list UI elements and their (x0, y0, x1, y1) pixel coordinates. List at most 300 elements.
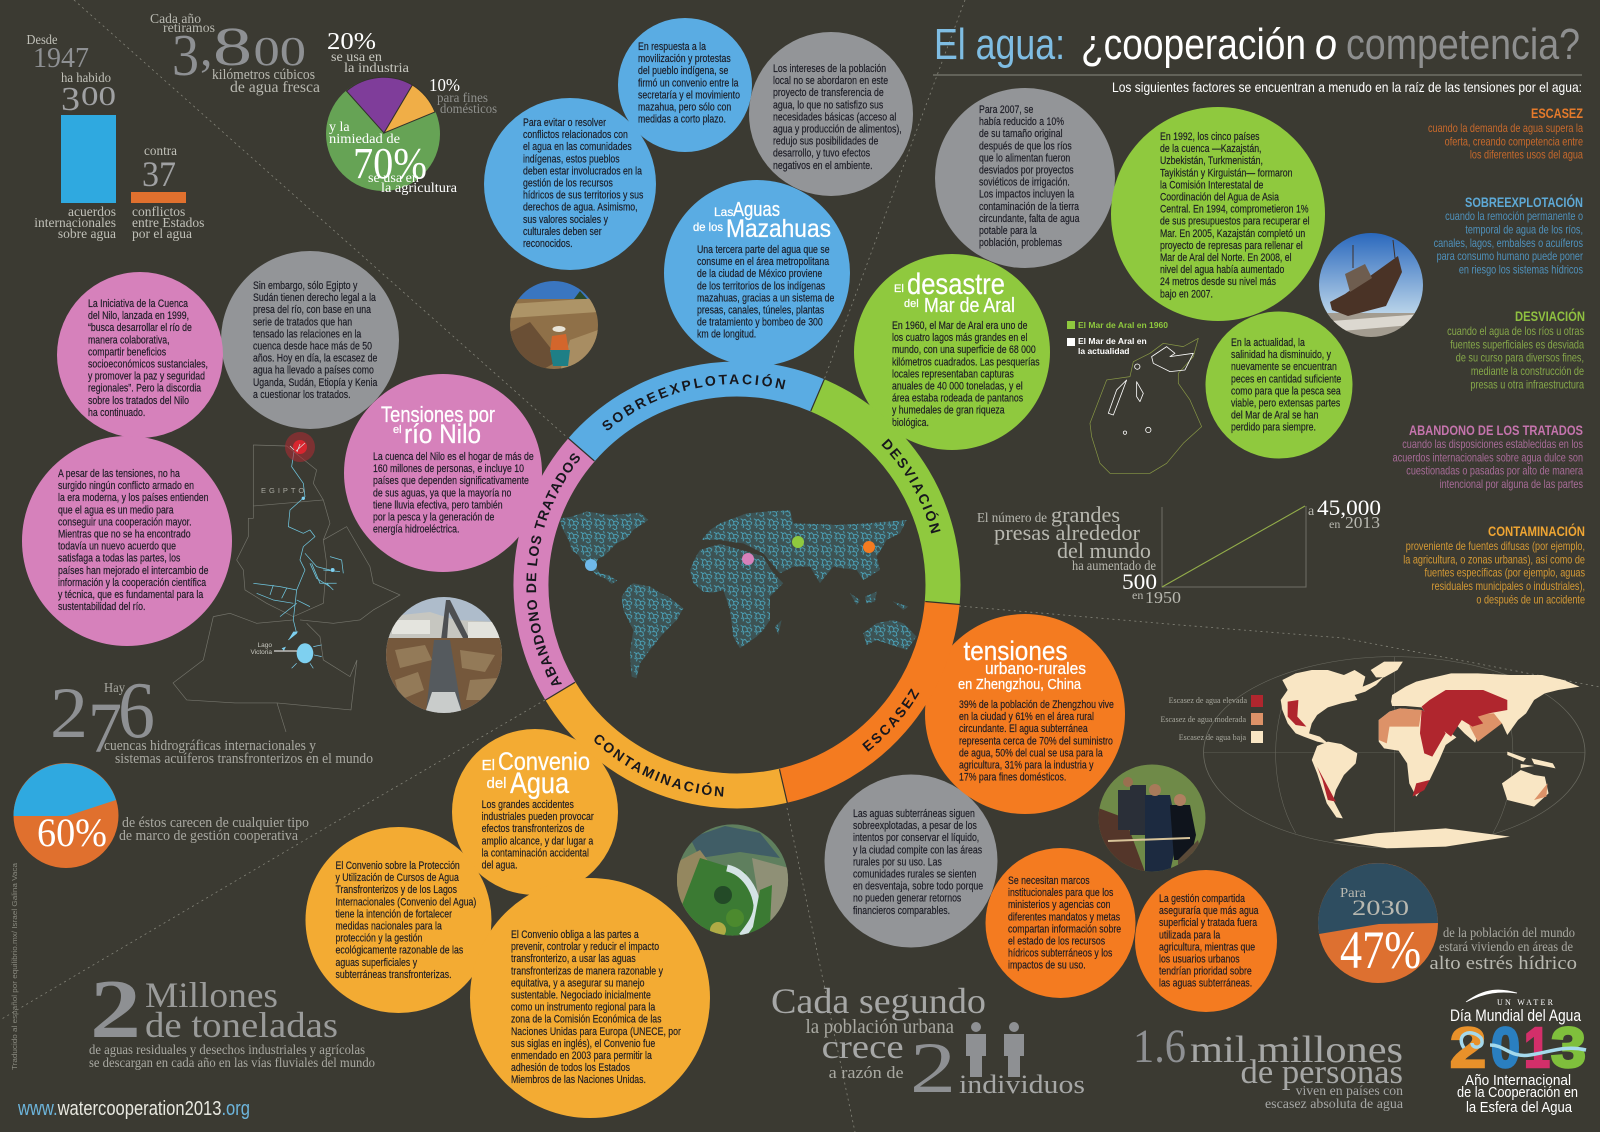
pie chart: 47% by 2030: alto estrés hídrico (1430, 953, 1577, 974)
circle: El Convenio obliga: prevenir, controlar y reducir el impacto (511, 941, 660, 953)
definition: Desviación: de su curso para diversos fines, (1456, 353, 1584, 365)
stat: 2 million tonnes: Millones (145, 975, 278, 1015)
circle: El Convenio sobre la Protección: tiene la intención de fortalecer (336, 909, 453, 921)
circle: En respuesta: medidas a corto plazo. (638, 114, 726, 126)
circle: Para evitar o resolver: indígenas, estos pueblos (523, 154, 620, 166)
circle: En 1992 (1111, 107, 1325, 321)
map: Aral Sea outline (1090, 338, 1202, 473)
circle: Para 2007: población, problemas (979, 237, 1062, 249)
stat: 300 agreements vs 37 conflicts: por el agua (132, 226, 192, 241)
circle: Tensiones por el río Nilo (344, 374, 542, 572)
circle: La gestión compartida: agricultura, mientras que (1159, 942, 1256, 954)
circle: El Convenio sobre la Protección: medidas nacionales para la (336, 921, 442, 933)
circle: Para 2007: contaminación de la tierra (979, 201, 1079, 213)
pie chart: 60%: 60% (37, 810, 107, 855)
stat: 300 agreements vs 37 conflicts: internacionales (34, 215, 116, 230)
circle: Sin embargo: Uganda, Sudán, Etiopía y Kenia (253, 377, 378, 389)
stat: 300 agreements vs 37 conflicts: entre Estados (132, 215, 204, 230)
circle: Las Aguas de los Mazahuas (664, 180, 850, 366)
circle: Para evitar o resolver: conflictos relacionados con (523, 129, 628, 141)
circle: En respuesta: mazahua, pero sólo con (638, 102, 731, 114)
circle: tensiones urbano-rurales: 39% de la población de Zhengzhou vive (959, 699, 1114, 711)
circle: Sin embargo: agua ha llevado a países como (253, 365, 374, 377)
circle: Para evitar o resolver: Para evitar o resolver (523, 117, 607, 129)
legend: water stress (1160, 695, 1263, 743)
circle: tensiones urbano-rurales: urbano-rurales (985, 659, 1086, 678)
circle: Sin embargo (221, 251, 399, 429)
circle: En la actualidad: salinidad ha disminuido, y (1231, 349, 1331, 361)
circle: Tensiones por el río Nilo: países que dependen significativamente (373, 475, 529, 487)
circle: En respuesta: En respuesta a la (638, 41, 706, 53)
definition: Contaminación: la agricultura, o zonas urbanas), así como de (1403, 554, 1585, 567)
title: o (1315, 20, 1337, 69)
legend: Aral Sea: El Mar de Aral en 1960 (1078, 320, 1168, 330)
definition: Escasez: ESCASEZ (1531, 105, 1583, 121)
circle: Iniciativa de la Cuenca del Nilo: “busca desarrollar el río de (88, 322, 192, 334)
circle: El Convenio obliga: zona de la Comisión Económica de las (511, 1014, 662, 1026)
pie chart: 60% (14, 763, 309, 868)
definition: Sobreexplotación: temporal de agua de los ríos, (1465, 225, 1583, 237)
circle: En 1992: Central. En 1994, comprometieron 1% (1160, 204, 1309, 216)
circle: Los intereses de la población: Los intereses de la población (773, 63, 886, 75)
stat: 300 agreements vs 37 conflicts: conflictos (132, 204, 185, 219)
logo: World Water Day 2013: 2 (1450, 1016, 1486, 1080)
pie chart: water use: 20% (327, 29, 376, 55)
circle: Las aguas subterráneas: y la ciudad compite con las áreas (853, 845, 982, 857)
circle: El desastre del Mar de Aral: locales representaban capturas (892, 369, 1014, 381)
circle: En 1992: Mar. En 2005, Kazajstán completó un (1160, 228, 1305, 240)
circle: El Convenio obliga: transfronterizas de manera razonable y (511, 966, 663, 978)
circle: Sin embargo: Sudán tienen derecho legal a la (253, 292, 376, 304)
pie chart: 60%: de éstos carecen de cualquier tipo (122, 815, 309, 831)
circle: Para evitar o resolver (484, 98, 656, 270)
circle: Se necesitan (986, 848, 1136, 998)
stat: 276 basins: Hay (104, 681, 125, 696)
stat: urban growth: la población urbana (806, 1016, 954, 1038)
logo: World Water Day 2013: la Esfera del Agua (1466, 1099, 1573, 1116)
circle: A pesar de las tensiones (22, 436, 232, 646)
definition: Desviación: fuentes superficiales es desviada (1450, 339, 1584, 352)
pie chart: water use: para fines (437, 90, 488, 105)
circle: El Convenio obliga: transfronterizo, a usar las aguas (511, 953, 636, 965)
definition: Desviación: presas u otra infraestructura (1470, 379, 1584, 392)
circle: La gestión compartida: los usuarios urbanos (1159, 954, 1240, 966)
circle: Iniciativa de la Cuenca del Nilo (57, 272, 223, 438)
circle: Para 2007: Para 2007, se (979, 104, 1034, 116)
bar: agreements (61, 115, 116, 203)
circle: Para evitar o resolver: gestión de los recursos (523, 178, 613, 190)
circle: En respuesta: firmó un convenio entre la (638, 78, 739, 90)
circle: En 1992: la Comisión Interestatal de (1160, 180, 1264, 192)
circle: La gestión compartida: las aguas subterráneas. (1159, 978, 1252, 990)
circle: Iniciativa de la Cuenca del Nilo: socioeconómicos sustanciales, (88, 359, 208, 371)
legend: water stress: Escasez de agua baja (1179, 733, 1246, 742)
circle: Los intereses de la población: agua, lo que no satisfizo sus (773, 100, 883, 112)
circle: En 1992: Uzbekistán, Turkmenistán, (1160, 155, 1263, 167)
circle: Sin embargo: tensado las relaciones en la (253, 329, 362, 341)
circle: tensiones urbano-rurales: agricultura, 31% para la industria y (959, 760, 1094, 772)
definition: Sobreexplotación: en riesgo los sistemas hídricos (1459, 265, 1583, 277)
stat: dams chart: 1950 (1145, 588, 1181, 607)
circle: tensiones urbano-rurales: tensiones (964, 636, 1068, 666)
stat: 2 million tonnes: de toneladas (145, 1005, 338, 1045)
icon: red glow on Nile delta (285, 432, 315, 462)
circle: El Convenio sobre la Protección: El Convenio sobre la Protección (336, 860, 460, 872)
circle: tensiones urbano-rurales: en la ciudad y 61% en el área rural (959, 711, 1094, 723)
stat: 300 agreements vs 37 conflicts: ha habido (61, 71, 111, 86)
circle: A pesar de las tensiones: A pesar de las tensiones, no ha (58, 468, 180, 480)
stat: dams chart: 2013 (1345, 513, 1380, 532)
stat: 276 basins (50, 667, 373, 768)
stat: 3,800 km3: retiramos (163, 21, 215, 36)
stat: urban growth (771, 981, 1085, 1108)
stat: dams chart: 500 (1122, 569, 1157, 594)
circle: El Convenio sobre la Protección (306, 827, 492, 1013)
circle: El desastre del Mar de Aral: y humedales de gran riqueza (892, 405, 1005, 417)
logo: World Water Day 2013: 3 (1551, 1016, 1586, 1080)
circle: El Convenio obliga: Miembros de las Naciones Unidas. (511, 1074, 646, 1086)
circle: El desastre del Mar de Aral: biológica. (892, 417, 929, 429)
stat: urban growth: 2 (910, 1028, 956, 1108)
icon: two people (966, 1022, 1024, 1077)
pie chart: 47% by 2030: de la población del mundo (1443, 925, 1575, 940)
circle: El Convenio sobre la Protección: protección y la gestión (336, 933, 422, 945)
photo: river valley (677, 824, 789, 938)
pie chart: water use (326, 29, 497, 196)
circle: Las Aguas de los Mazahuas: de los (693, 220, 723, 234)
stat: 3,800 km3: , (200, 20, 212, 76)
stat: 300 agreements vs 37 conflicts: 37 (142, 154, 176, 194)
stat: 276 basins: sistemas acuíferos transfronterizos en el mundo (115, 751, 373, 767)
circle: Para 2007: que lo alimentan fueron (979, 153, 1070, 165)
legend: Aral Sea: El Mar de Aral en (1078, 336, 1147, 346)
label: Lago Victoria: Victoria (250, 649, 272, 656)
circle: En la actualidad: como para que la pesca sea (1231, 386, 1341, 398)
stat: 300 agreements vs 37 conflicts: Desde (26, 33, 58, 48)
circle: Tensiones por el río Nilo: tiene lluvia efectiva, pero también (373, 500, 503, 512)
circle: Se necesitan: compartan información sobre (1008, 924, 1122, 936)
circle: Los intereses de la población (749, 32, 913, 196)
circle: Las aguas subterráneas: intentos por conservar el líquido, (853, 832, 979, 844)
circle: Iniciativa de la Cuenca del Nilo: y promover la paz y seguridad (88, 371, 205, 383)
ring segment: Contaminación (546, 682, 787, 808)
ring segment: Abandono de los tratados (513, 438, 595, 700)
circle: En la actualidad: peces en cantidad suficiente (1231, 374, 1342, 386)
circle: Para evitar o resolver: hídricos de sus territorios y sus (523, 190, 643, 202)
circle: En respuesta: movilización y protestas (638, 53, 731, 65)
circle: Sin embargo: serie de tratados que han (253, 317, 352, 329)
circle: Tensiones por el río Nilo: de sus aguas, ya que la mayoría no (373, 488, 512, 500)
circle: Iniciativa de la Cuenca del Nilo: compartir beneficios (88, 347, 166, 359)
title: ¿cooperación (1081, 20, 1306, 69)
stat: 1.6 billion: 1.6 (1133, 1020, 1186, 1073)
circle: Las aguas subterráneas: en desventaja, sobre todo porque (853, 881, 984, 893)
stat: 276 basins: 2 (50, 673, 88, 753)
circle: El Convenio obliga: como un instrumento regional para la (511, 1002, 656, 1014)
logo: World Water Day 2013: 0 (1491, 1016, 1520, 1080)
logo: World Water Day 2013: UN WATER (1497, 998, 1554, 1007)
circle: Las Aguas de los Mazahuas: Las (714, 205, 733, 219)
circle: A pesar de las tensiones: todavía un nuevo acuerdo que (58, 541, 176, 553)
circle: Para evitar o resolver: derechos de agua. Asimismo, (523, 202, 638, 214)
circle: Para 2007: de su tamaño original (979, 128, 1063, 140)
stat: 1.6 billion: de personas (1240, 1054, 1403, 1091)
definition: Sobreexplotación: cuando la remoción permanente o (1445, 211, 1583, 223)
circle: Para 2007: después de que los ríos (979, 141, 1072, 153)
circle: Las aguas subterráneas: sobreexplotadas, a pesar de los (853, 820, 977, 832)
circle: El Convenio del Agua: Agua (510, 767, 569, 800)
circle: El Convenio sobre la Protección: subterráneas transfronterizas. (336, 969, 452, 981)
circle: Tensiones por el río Nilo: Tensiones por (381, 402, 495, 427)
stat: 3,800 km3: kilómetros cúbicos (212, 67, 315, 83)
pie chart: 60%: de marco de gestión cooperativa (119, 828, 298, 844)
pie chart: water use: se usa en (368, 171, 419, 186)
circle: Las Aguas de los Mazahuas: Aguas (733, 199, 780, 221)
circle: Las Aguas de los Mazahuas: Una tercera parte del agua que se (697, 244, 830, 256)
circle: Los intereses de la población: local no se abordaron en este (773, 75, 889, 87)
circle: En 1992: de sus presupuestos para recuperar el (1160, 216, 1310, 228)
stat: 1.6 billion (1133, 1020, 1404, 1112)
stat: urban growth: a razón de (829, 1063, 904, 1082)
circle: En la actualidad: En la actualidad, la (1231, 337, 1305, 349)
pie chart: 47% by 2030: Para (1340, 886, 1367, 901)
stat: dams chart: ha aumentado de (1072, 558, 1156, 573)
circle: Para 2007: Los impactos incluyen la (979, 189, 1075, 201)
circle: El Convenio obliga: equitativa, y a asegurar su manejo (511, 978, 645, 990)
circle: A pesar de las tensiones: Mientras que no se ha encontrado (58, 529, 191, 541)
ring: five factors (513, 362, 960, 808)
circle: Las Aguas de los Mazahuas: de tratamiento y bombeo de 300 (697, 317, 823, 329)
definition: Contaminación: proveniente de fuentes difusas (por ejemplo, (1406, 541, 1585, 553)
circle: Los intereses de la población: desarrollo, y tuvo efectos (773, 148, 870, 160)
circle: A pesar de las tensiones: surgido ningún conflicto armado en (58, 480, 194, 492)
circle: Para 2007: desviados por proyectos (979, 165, 1074, 177)
stat: 300 agreements vs 37 conflicts: acuerdos (68, 204, 116, 219)
circle: Para 2007: potable para la (979, 225, 1037, 237)
logo: World Water Day 2013: 1 (1524, 1016, 1550, 1080)
photo: factory and channel (386, 597, 502, 713)
stat: dams chart: El número de (977, 510, 1047, 525)
stat: dams chart (977, 495, 1381, 607)
definition: Abandono de los tratados: acuerdos internacionales sobre agua dulce son (1393, 452, 1583, 465)
stat: 2 million tonnes (89, 963, 375, 1071)
circle: A pesar de las tensiones: que el agua es un medio para (58, 505, 174, 517)
circle: El Convenio obliga: sustentable. Negociado inicialmente (511, 990, 651, 1002)
circle: El Convenio sobre la Protección: aguas superficiales y (336, 957, 417, 969)
circle: Tensiones por el río Nilo: 160 millones de personas, e incluye 10 (373, 463, 524, 475)
pie chart: water use: y la (329, 120, 350, 135)
definition: Escasez (1428, 105, 1583, 162)
circle: Las Aguas de los Mazahuas: de los territorios de los indígenas (697, 281, 825, 293)
circle: Tensiones por el río Nilo: el (393, 424, 402, 436)
ring segment: Escasez: ESCASEZ (862, 688, 920, 752)
ring segment: Contaminación: CONTAMINACIÓN (594, 734, 724, 797)
circle: En 1992: nivel del agua había aumentado (1160, 264, 1285, 276)
circle: tensiones urbano-rurales: de agua, 50% del cual se usa para la (959, 748, 1103, 760)
stat: 300 agreements vs 37 conflicts (26, 33, 204, 241)
circle: El desastre del Mar de Aral: área estaba rodeada de pantanos (892, 393, 1023, 405)
stat: dams chart: grandes (1051, 502, 1120, 527)
circle: En 1992: proyecto de represas para rellenar el (1160, 240, 1303, 252)
stat: 300 agreements vs 37 conflicts: contra (144, 144, 178, 159)
circle: Sin embargo: presa del río, con base en una (253, 304, 371, 316)
circle: El desastre del Mar de Aral: los cuatro lagos más grandes en el (892, 332, 1027, 344)
definition: Abandono de los tratados: cuando las disposiciones establecidas en los (1402, 439, 1583, 451)
definition: Sobreexplotación: canales, lagos, embalses o acuíferos (1434, 238, 1583, 250)
logo: World Water Day 2013: Año Internacional (1465, 1072, 1571, 1089)
url: www.watercooperation2013.org (17, 1098, 250, 1120)
definition: Abandono de los tratados: cuestionadas o pasadas por alto de manera (1406, 466, 1583, 478)
circle: tensiones urbano-rurales: circundante. El agua subterránea (959, 723, 1088, 735)
circle: A pesar de las tensiones: información y la cooperación científica (58, 577, 207, 589)
logo: World Water Day 2013: de la Cooperación en (1457, 1084, 1578, 1101)
stat: urban growth: Cada segundo (771, 981, 986, 1021)
label: Lago Victoria (250, 642, 297, 656)
credit: Traducido al español por equilibrio.mx/ Israel Galina Vaca (10, 862, 19, 1070)
circle: En 1992: Tayikistán y Kirguistán— formaron (1160, 168, 1293, 180)
stat: dams chart: a (1308, 504, 1315, 519)
definition: Escasez: oferta, creando competencia entre (1445, 136, 1583, 149)
definition: Contaminación: fuentes específicas (por ejemplo, aguas (1424, 568, 1585, 580)
circle: En 1992: Coordinación del Agua de Asia (1160, 192, 1279, 204)
circle: Sin embargo: cuenca desde hace más de 50 (253, 341, 372, 353)
definition: Escasez: los diferentes usos del agua (1470, 150, 1583, 162)
circle: Los intereses de la población: agua y producción de alimentos), (773, 124, 902, 136)
circle: Las aguas subterráneas: Las aguas subterráneas siguen (853, 808, 975, 820)
circle: La gestión compartida (1135, 870, 1277, 1012)
circle: Sin embargo: años. Hoy en día, la escasez de (253, 353, 378, 365)
circle: El Convenio del Agua (452, 729, 618, 895)
circle: En 1992: 24 metros desde su nivel más (1160, 276, 1276, 288)
stat: 2 million tonnes: de aguas residuales y desechos industriales y agrícolas (89, 1043, 365, 1058)
circle: A pesar de las tensiones: países han mejorado el intercambio de (58, 565, 209, 577)
circle: El Convenio del Agua: del agua. (482, 860, 518, 872)
circle: En 1992: Mar de Aral del Norte. En 2008, el (1160, 252, 1292, 264)
circle: Se necesitan: ministerios y agencias con (1008, 899, 1110, 911)
circle: El Convenio sobre la Protección: y Utilización de Cursos de Agua (336, 872, 459, 884)
bar: conflicts (131, 192, 186, 203)
circle: Las Aguas de los Mazahuas: presas, canales, túneles, plantas (697, 305, 824, 317)
circle: Para evitar o resolver: culturales deben ser (523, 226, 602, 238)
definition: Contaminación (1403, 522, 1585, 607)
circle: Iniciativa de la Cuenca del Nilo: sobre los tratados del Nilo (88, 395, 189, 407)
stat: 1.6 billion: mil millones (1190, 1029, 1403, 1071)
circle: Sin embargo: Sin embargo, sólo Egipto y (253, 280, 357, 292)
circle: A pesar de las tensiones: satisfaga a todas las partes, los (58, 553, 180, 565)
stat: dams chart: en (1132, 588, 1143, 602)
stat: dams chart: 45,000 (1317, 495, 1381, 520)
pie chart: water use: se usa en (331, 50, 382, 65)
circle: El Convenio del Agua: Los grandes accidentes (482, 799, 574, 811)
map: Nile basin (173, 432, 400, 732)
label: Egipto: EGIPTO (261, 486, 307, 495)
circle: El Convenio sobre la Protección: Internacionales (Convenio del Agua) (336, 897, 476, 909)
circle: En 1992: En 1992, los cinco países (1160, 131, 1260, 143)
circle: La gestión compartida: aseguraría que más agua (1159, 905, 1259, 917)
stat: urban growth: individuos (959, 1070, 1085, 1099)
circle: En la actualidad: perdido para siempre. (1231, 422, 1316, 434)
circle: El Convenio obliga: enmendado en 2003 para permitir la (511, 1050, 652, 1062)
circle: Las Aguas de los Mazahuas: Mazahuas (726, 215, 831, 243)
ring segment: Desviación: DESVIACIÓN (882, 438, 940, 534)
ring segment: Sobreexplotación (568, 362, 824, 462)
definition: Contaminación: o después de un accidente (1476, 594, 1585, 607)
pie chart: 47% by 2030 (1318, 863, 1577, 983)
title (934, 20, 1580, 69)
circle: Se necesitan: impactos de su uso. (1008, 960, 1086, 972)
circle: El Convenio obliga: sus siglas en inglés), el Convenio fue (511, 1038, 656, 1050)
circle: En la actualidad: nuevamente se encuentran (1231, 361, 1337, 373)
pie chart: water use: domésticos (440, 101, 497, 116)
circle: A pesar de las tensiones: conseguir una cooperación mayor. (58, 517, 192, 529)
panel: Nile circles (22, 251, 542, 646)
stat: 3,800 km3: de agua fresca (230, 79, 320, 96)
ring segment: Sobreexplotación: SOBREEXPLOTACIÓN (602, 374, 786, 430)
stat: 3,800 km3: 3 (172, 22, 199, 88)
circle: Para evitar o resolver: reconocidos. (523, 238, 573, 250)
stat: urban growth: crece (822, 1029, 904, 1066)
stat: 276 basins: 7 (88, 688, 122, 768)
circle: Tensiones por el río Nilo: La cuenca del Nilo es el hogar de más de (373, 451, 534, 463)
circle: Se necesitan: Se necesitan marcos (1008, 875, 1090, 887)
stat: dams chart: en (1329, 517, 1340, 531)
circle: Las aguas subterráneas: rurales por su uso. Las (853, 857, 942, 869)
definition: Desviación (1447, 307, 1585, 392)
circle: Iniciativa de la Cuenca del Nilo: manera colaborativa, (88, 335, 170, 347)
circle: El Convenio del Agua: El (482, 757, 495, 774)
circle: El desastre del Mar de Aral (854, 254, 1050, 450)
world map of rivers (560, 510, 917, 678)
title: El agua: (934, 20, 1065, 69)
circle: tensiones urbano-rurales: en Zhengzhou, China (958, 676, 1082, 693)
circle: La gestión compartida: La gestión compartida (1159, 893, 1245, 905)
stat: 3,800 km3: Cada año (150, 12, 201, 27)
stat: 1.6 billion: escasez absoluta de agua (1265, 1097, 1404, 1112)
circle: En la actualidad: viable, pero extensas partes (1231, 398, 1340, 410)
stat: 1.6 billion: viven en países con (1296, 1084, 1403, 1099)
circle: En la actualidad: del Mar de Aral se han (1231, 410, 1318, 422)
circle: El Convenio sobre la Protección: ecológicamente razonable de las (336, 945, 463, 957)
circle: El desastre del Mar de Aral: mundo, con una superficie de 68 000 (892, 344, 1036, 356)
circle: Tensiones por el río Nilo: por la pesca y la generación de (373, 512, 495, 524)
circle: Para 2007: había reducido a 10% (979, 116, 1064, 128)
pie chart: 47% by 2030: 47% (1340, 920, 1421, 980)
circle: Las aguas subterráneas: comunidades rurales se sienten (853, 869, 976, 881)
photo: indigenous woman in field (510, 281, 598, 371)
circle: El desastre del Mar de Aral: En 1960, el Mar de Aral era uno de (892, 320, 1028, 332)
circle: El desastre del Mar de Aral: del (904, 298, 919, 310)
logo: World Water Day 2013 (1450, 990, 1586, 1116)
circle: Iniciativa de la Cuenca del Nilo: ha continuado. (88, 407, 145, 419)
circle: La gestión compartida: utilizada para la (1159, 930, 1221, 942)
photo: stranded ship (1319, 233, 1423, 339)
circle: Tensiones por el río Nilo: energía hidroeléctrica. (373, 524, 459, 536)
map: water stress (1160, 657, 1585, 848)
pie chart: water use: 10% (429, 75, 460, 95)
stat: dams chart: del mundo (1057, 538, 1151, 563)
stat: 300 agreements vs 37 conflicts: sobre agua (58, 226, 116, 241)
circle: Para evitar o resolver: sus valores sociales y (523, 214, 608, 226)
circle: En la actualidad (1206, 312, 1352, 458)
circle: El desastre del Mar de Aral: desastre (907, 268, 1005, 301)
circle: El desastre del Mar de Aral: anuales de 40 000 toneladas, y el (892, 381, 1023, 393)
legend: Aral Sea: la actualidad (1078, 346, 1130, 356)
stat: 3,800 km3: 8 (213, 16, 252, 77)
circle: tensiones urbano-rurales: 17% para fines domésticos. (959, 772, 1066, 784)
definition: Abandono de los tratados (1393, 422, 1583, 491)
circle: El Convenio del Agua: la contaminación accidental (482, 848, 589, 860)
stat: 300 agreements vs 37 conflicts: 00 (81, 81, 116, 111)
